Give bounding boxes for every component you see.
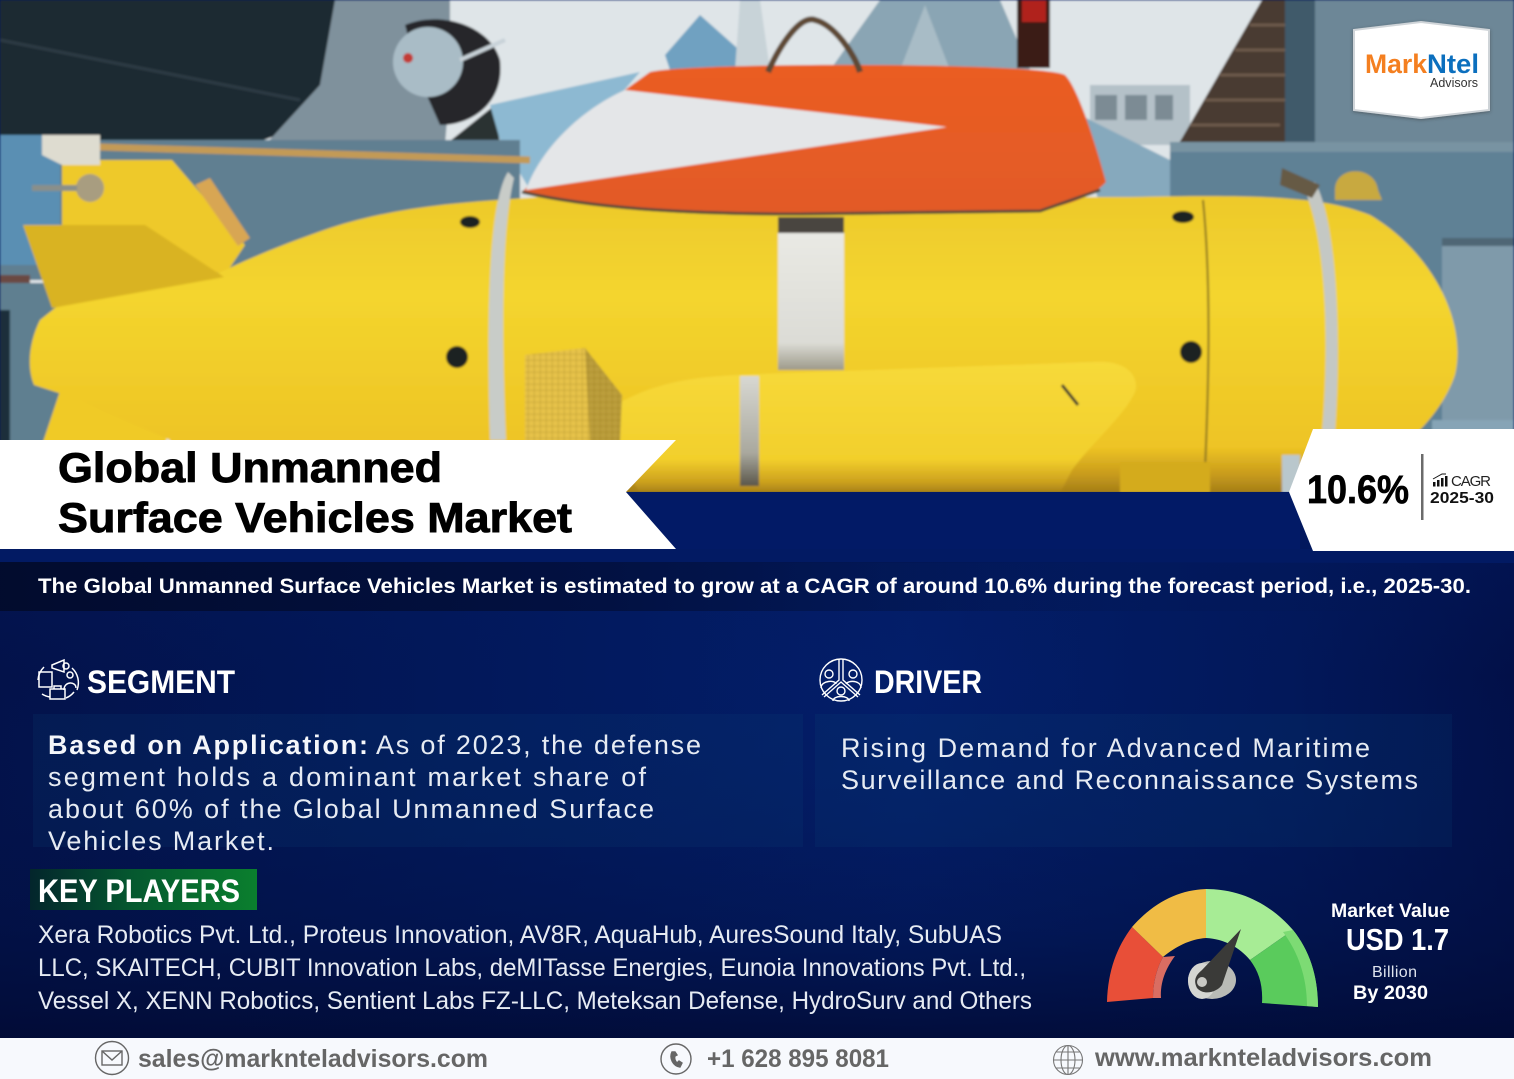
icon: email: [96, 1042, 128, 1074]
title text: Global Unmanned: [58, 444, 442, 491]
email address: sales@marknteladvisors.com: [138, 1045, 488, 1073]
market value callout: Billion: [1372, 964, 1417, 981]
segment body text: Based on Application:: [48, 730, 368, 760]
segment body text: Vehicles Market.: [48, 826, 274, 856]
market value callout: USD 1.7: [1346, 922, 1449, 957]
segment body text: segment holds a dominant market share of: [48, 762, 646, 792]
CAGR label: CAGR: [1451, 473, 1491, 490]
driver heading: DRIVER: [874, 664, 982, 700]
panel: segment: [33, 660, 803, 856]
CAGR badge: [1289, 429, 1514, 551]
gauge needle: [1195, 929, 1241, 992]
intro strip: The Global Unmanned Surface Vehicles Market is estimated to grow at a CAGR of around 10.6% during the forecast period, i.e., 2025-30.: [38, 575, 1471, 598]
driver body text: Rising Demand for Advanced Maritime: [841, 733, 1370, 763]
photo: orange dome: [522, 65, 1106, 213]
gauge chart: [1107, 889, 1318, 1007]
gauge hub: [1188, 961, 1236, 999]
phone number: +1 628 895 8081: [707, 1045, 889, 1073]
panel: key players: [30, 869, 1032, 1015]
navy band below photo: [626, 492, 1300, 560]
driver body text: [841, 733, 1418, 795]
footer bar: [0, 1038, 1514, 1079]
intro strip: [0, 562, 1514, 611]
photo: fins: [62, 160, 245, 275]
photo: unmanned vehicle on ship deck: [0, 0, 1514, 493]
photo: steel deck blocks: [0, 140, 520, 280]
title text: [58, 444, 572, 541]
key players list: LLC, SKAITECH, CUBIT Innovation Labs, deMITasse Energies, Eunoia Innovations Pvt. Ltd.,: [38, 954, 1026, 982]
key players list: Xera Robotics Pvt. Ltd., Proteus Innovation, AV8R, AquaHub, AuresSound Italy, SubUAS: [38, 921, 1002, 949]
panel: driver: [815, 659, 1452, 847]
icon: segment: [38, 660, 78, 699]
icon: phone: [661, 1044, 691, 1074]
logo: MarkNtel Advisors: Advisors: [1430, 75, 1478, 90]
key players list: Vessel X, XENN Robotics, Sentient Labs FZ-LLC, Meteksan Defense, HydroSurv and Others: [38, 987, 1032, 1015]
market value callout: Market Value: [1331, 901, 1450, 922]
logo: MarkNtel Advisors: [1354, 22, 1489, 118]
driver body text: Surveillance and Reconnaissance Systems: [841, 765, 1418, 795]
segment body text: As of 2023, the defense: [376, 730, 701, 760]
icon: globe: [1054, 1045, 1082, 1075]
segment body text: [48, 730, 701, 856]
logo: MarkNtel Advisors: Ntel: [1427, 49, 1479, 79]
segment body text: about 60% of the Global Unmanned Surface: [48, 794, 654, 824]
icon: growth chart: [1433, 474, 1448, 486]
CAGR period: 2025-30: [1430, 490, 1494, 507]
icon: driver: [820, 659, 862, 701]
photo: straps and rod: [100, 147, 530, 160]
title ribbon: [0, 440, 676, 549]
photo: background ship and ladder: [1090, 85, 1190, 145]
CAGR value: 10.6%: [1307, 468, 1409, 512]
photo: fastener holes: [460, 216, 480, 228]
key players heading: KEY PLAYERS: [38, 873, 240, 909]
photo: silver band and lower tube: [778, 217, 844, 235]
navy background panel: [0, 480, 1514, 1079]
key players list: [38, 921, 1032, 1015]
logo: MarkNtel Advisors: Mark: [1365, 49, 1428, 79]
market value callout: By 2030: [1353, 983, 1428, 1004]
market value callout: [1331, 901, 1450, 1004]
segment heading: SEGMENT: [87, 664, 235, 700]
website: www.marknteladvisors.com: [1094, 1044, 1432, 1072]
photo: dark ship hull: [0, 0, 335, 145]
title text: Surface Vehicles Market: [58, 494, 572, 541]
photo: yellow vehicle body: [30, 196, 1458, 493]
